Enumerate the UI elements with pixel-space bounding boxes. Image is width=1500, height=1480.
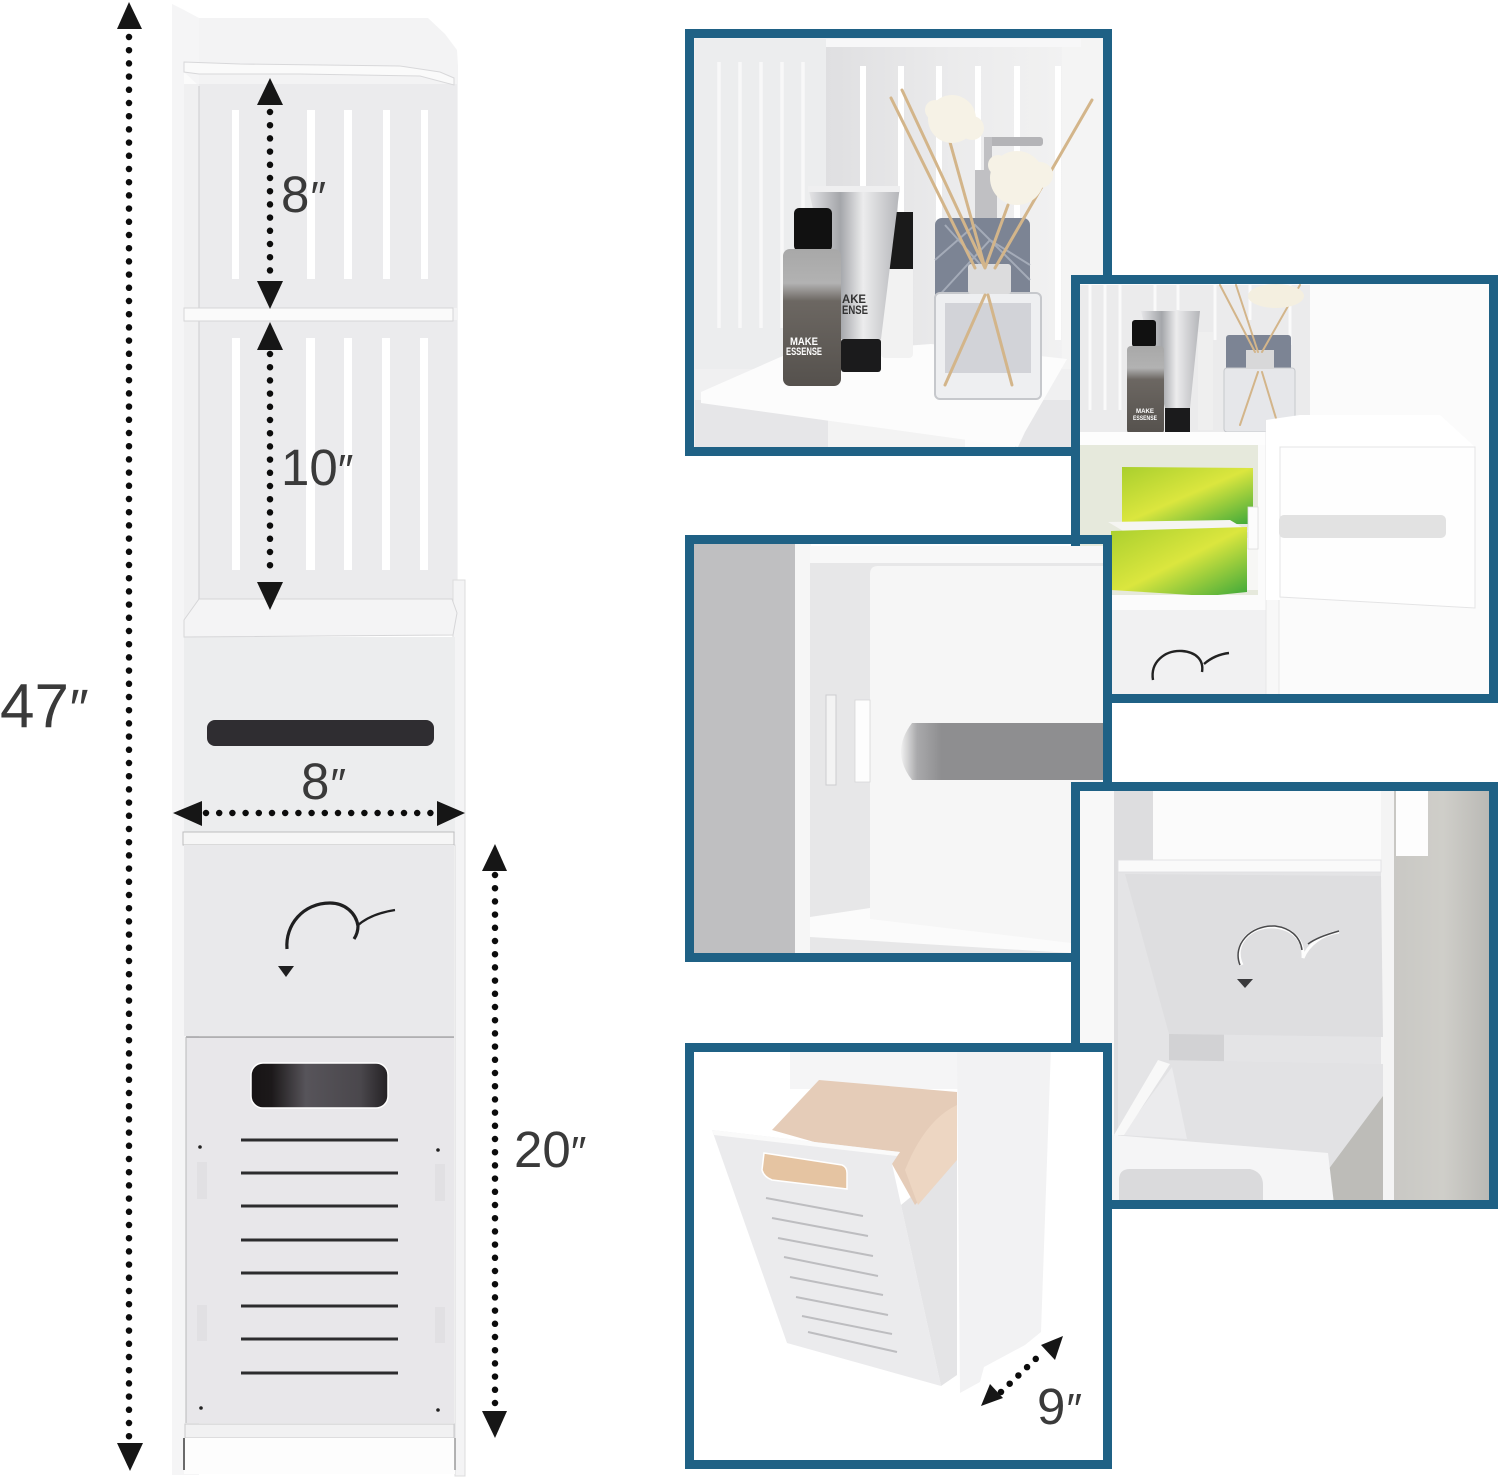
bin outer side	[1328, 1096, 1383, 1204]
top board	[1071, 546, 1103, 563]
front post	[1381, 787, 1394, 1204]
top shelf	[184, 62, 454, 85]
small tube cap	[1165, 408, 1190, 432]
side wall with slots	[695, 39, 826, 369]
bottom shelf	[185, 1424, 454, 1438]
black-cap bottle	[783, 208, 841, 386]
diffuser reeds	[891, 90, 1092, 268]
flip drawer face	[1112, 610, 1268, 698]
open bin	[1110, 1060, 1383, 1204]
tissue compartment interior	[1080, 445, 1258, 595]
open door	[1248, 415, 1475, 608]
trash bin door	[186, 1037, 454, 1423]
louvers	[241, 1140, 398, 1373]
white side post	[795, 540, 811, 957]
lower compartment back wall	[184, 320, 457, 620]
right side post	[453, 580, 465, 1476]
dimension: overall height 47 inches: 47″	[0, 672, 88, 741]
dimension: second compartment 10 inches	[257, 322, 353, 610]
inner wall	[810, 563, 1107, 957]
paper flowers	[925, 95, 1053, 205]
dimension: lower section 20 inches	[482, 844, 586, 1438]
panel frame	[690, 540, 1108, 958]
tall cabinet product photo	[172, 4, 465, 1476]
bin front panel	[1110, 1135, 1334, 1204]
dimension: lower section 20 inches: 20″	[514, 1121, 586, 1178]
tissue slot	[207, 720, 434, 746]
inner cavity	[1118, 860, 1383, 1140]
diffuser glass bottle	[935, 264, 1041, 399]
bin handle hole	[251, 1063, 388, 1108]
dimension: depth 9 inches: 9″	[1037, 1378, 1081, 1435]
clear hinge clip	[826, 695, 836, 785]
small black bottle	[1127, 320, 1164, 434]
side post	[1266, 420, 1279, 698]
small black bottle: MAKE	[1136, 409, 1154, 415]
soap dispenser	[934, 137, 1043, 294]
small white bottle	[1198, 332, 1213, 430]
bin handle hole	[1119, 1169, 1263, 1204]
dimension: width 8 inches	[173, 753, 465, 826]
tissue compartment	[184, 637, 455, 833]
dimension: width 8 inches: 8″	[301, 753, 345, 810]
back wall with slots	[826, 47, 1061, 345]
green tissue packs	[1108, 467, 1258, 596]
panel frame	[1076, 280, 1494, 698]
dimension: second compartment 10 inches: 10″	[281, 439, 353, 496]
small diffuser	[1220, 284, 1304, 432]
panel frame	[1076, 786, 1494, 1204]
door edge	[1396, 787, 1428, 856]
middle shelf	[184, 308, 453, 321]
grey background	[690, 540, 795, 957]
small silver tube	[1141, 311, 1200, 408]
flip door	[184, 845, 454, 1036]
dimension: overall height 47 inches	[0, 2, 143, 1471]
silver tube: AKE	[842, 292, 866, 306]
upper door	[1153, 787, 1381, 860]
tilted flap	[1125, 874, 1383, 1037]
area below shelf	[695, 400, 1071, 447]
bottom shelf	[810, 908, 1071, 953]
cabinet top back board	[199, 18, 458, 600]
handle hole	[762, 1153, 847, 1189]
black-cap bottle: MAKE	[790, 336, 818, 348]
inner left wall	[1114, 787, 1153, 1137]
panel: trash bin with liner	[690, 1047, 1108, 1464]
panel frame	[690, 1048, 1108, 1464]
dimension: top compartment 8 inches: 8″	[281, 166, 325, 223]
divider shelf	[183, 832, 454, 845]
panel frame	[690, 34, 1108, 452]
lower shelf	[1192, 595, 1218, 596]
door panel	[855, 566, 1107, 946]
cabinet left side panel	[172, 4, 199, 1475]
panel: top shelf with toiletries	[690, 34, 1108, 452]
silver tube	[808, 186, 900, 372]
white bottle	[881, 212, 913, 358]
icon: curved open arrow	[278, 903, 395, 977]
shelf	[1118, 860, 1381, 872]
outer wall background	[1394, 787, 1493, 1204]
door slot	[901, 723, 1103, 780]
silver tube: ENSE	[842, 303, 868, 317]
tilted flap	[712, 1130, 941, 1386]
screw holes	[198, 1145, 440, 1412]
lower shelf surface	[184, 599, 457, 637]
panel: door detail	[690, 540, 1108, 958]
back wall	[1080, 285, 1310, 432]
plastic liner	[772, 1080, 957, 1205]
cabinet base	[184, 1438, 455, 1474]
dimension: depth 9 inches	[981, 1336, 1081, 1435]
cabinet upper front	[790, 1047, 958, 1089]
black-cap bottle: ESSENSE	[786, 346, 822, 358]
dimension: top compartment 8 inches	[257, 78, 325, 309]
small dispenser	[1226, 335, 1291, 368]
small black bottle: ESSENSE	[1133, 416, 1157, 422]
icon: curved open arrow	[1153, 651, 1229, 680]
louvers	[766, 1198, 897, 1352]
upper compartment back wall	[184, 72, 457, 308]
panel: open tissue compartment	[1076, 280, 1494, 698]
shelf edge	[1128, 432, 1266, 434]
door tab	[855, 700, 870, 782]
shelf	[701, 344, 1067, 447]
cabinet side	[957, 1047, 1051, 1393]
icon: curved open arrow	[1237, 926, 1339, 988]
panel: open flip-out bin	[1076, 786, 1494, 1204]
interior side	[901, 1159, 957, 1386]
